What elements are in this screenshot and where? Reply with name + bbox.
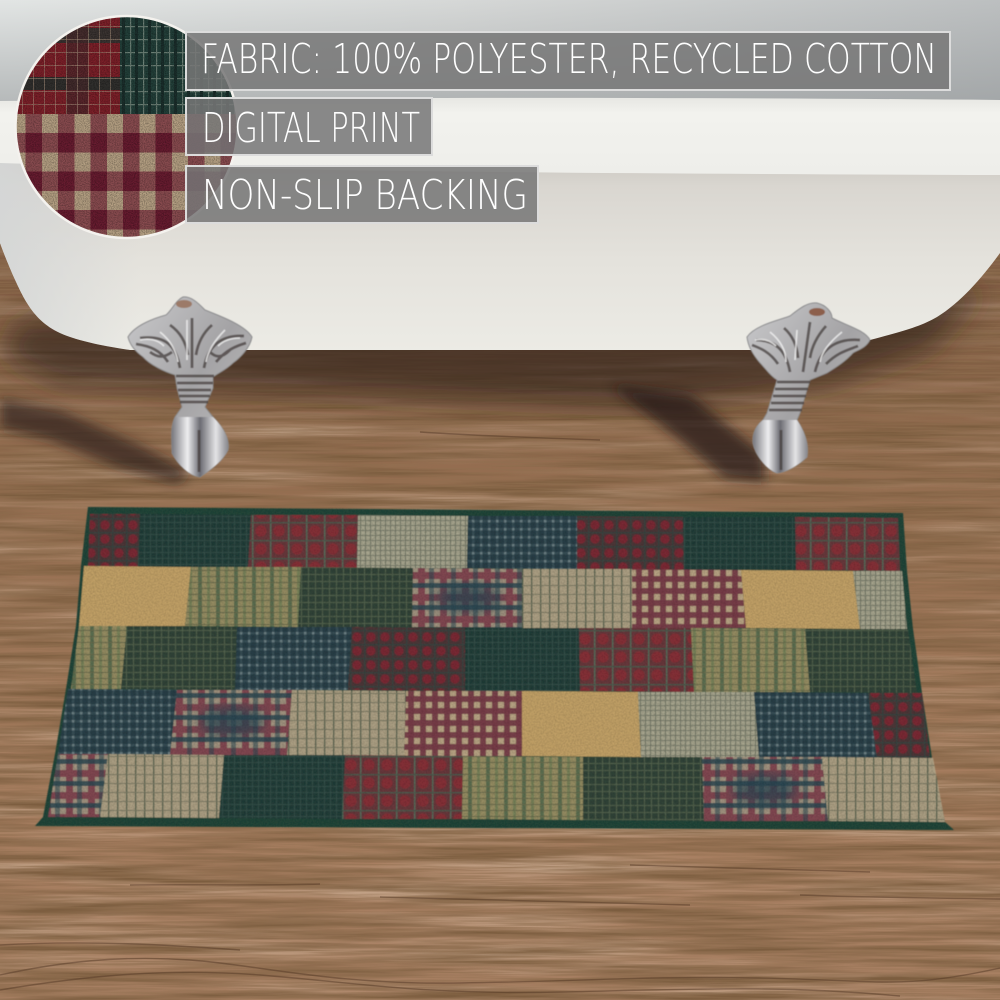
rug surface texture <box>35 507 954 830</box>
clawfoot: right <box>747 303 870 473</box>
rug row 4 <box>58 689 930 758</box>
floor shadows under tub <box>0 290 985 484</box>
rug: patchwork mat <box>35 507 954 830</box>
rug row 1 <box>88 514 900 571</box>
rug row 3 <box>71 626 917 693</box>
bathtub body <box>0 150 1000 350</box>
label: non-slip backing: NON-SLIP BACKING <box>202 171 528 219</box>
label: digital print <box>186 98 432 155</box>
fabric close-up circle <box>16 14 236 240</box>
rug row 2 <box>79 566 907 629</box>
wood floor <box>0 238 1000 1000</box>
rug green binding <box>35 507 954 830</box>
bathtub rim <box>0 98 1000 175</box>
background: wall <box>0 0 1000 260</box>
label: digital print: DIGITAL PRINT <box>202 104 420 152</box>
rug row 5 <box>48 754 945 822</box>
clawfoot: left <box>128 297 252 477</box>
